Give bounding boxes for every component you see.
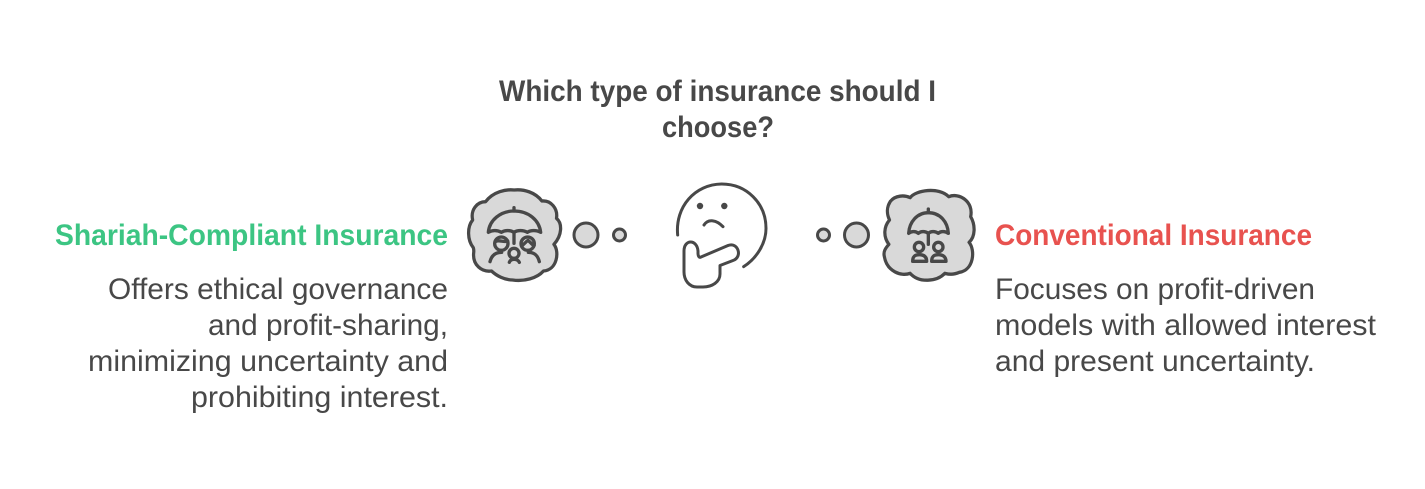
icon: left large thought bubble <box>574 223 598 247</box>
icon: right small thought bubble <box>818 229 830 241</box>
icon: right thought cloud with umbrella and people <box>884 190 974 280</box>
icon: left small thought bubble <box>614 229 626 241</box>
text block: Shariah description: minimizing uncertainty and <box>88 345 448 378</box>
title: choose? <box>662 111 774 144</box>
icon: left thought cloud with umbrella and family <box>469 190 561 280</box>
icon: right large thought bubble <box>844 223 868 247</box>
title: Which type of insurance should I <box>499 75 936 108</box>
icon: thinking face <box>677 184 766 287</box>
text block: Conventional description: and present uncertainty. <box>995 345 1315 378</box>
text block: Shariah description <box>88 273 448 414</box>
heading: Shariah-Compliant Insurance: Shariah-Compliant Insurance <box>55 219 448 252</box>
text block: Conventional description: Focuses on profit-driven <box>995 273 1315 306</box>
text block: Shariah description: and profit-sharing, <box>208 309 448 342</box>
heading: Conventional Insurance: Conventional Insurance <box>995 219 1312 252</box>
text block: Shariah description: Offers ethical governance <box>108 273 448 306</box>
text block: Shariah description: prohibiting interest. <box>191 381 448 414</box>
text block: Conventional description <box>995 273 1376 378</box>
title <box>499 75 936 144</box>
text block: Conventional description: models with allowed interest <box>995 309 1376 342</box>
